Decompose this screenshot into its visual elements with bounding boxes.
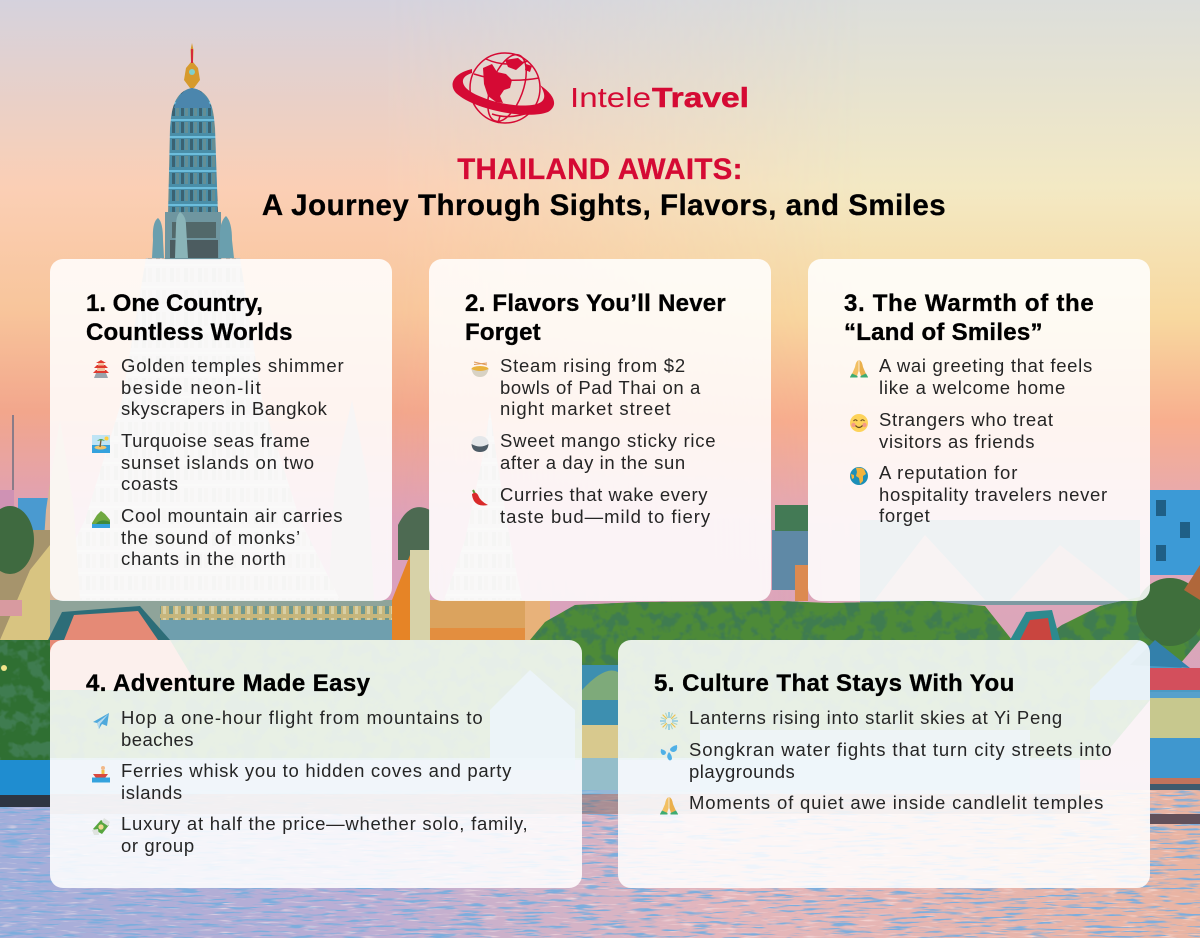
- water: [0, 758, 1200, 938]
- logo: InteleTravel: [452, 52, 749, 124]
- item: golden temples: Golden temples shimmer: [121, 355, 344, 376]
- item: wai greeting: A wai greeting that feels: [879, 355, 1093, 376]
- item: luxury: Luxury at half the price—whether solo, family,: [121, 813, 528, 834]
- icon: island: [92, 435, 110, 453]
- item: strangers: [850, 409, 1054, 452]
- item: cool mountain air: [92, 505, 343, 569]
- item: mango sticky rice: Sweet mango sticky rice: [500, 430, 716, 451]
- heading: 5. Culture That Stays With You: [654, 670, 1015, 697]
- item: golden temples: beside neon-lit: [121, 377, 262, 398]
- pavilions behind lower cards: [490, 640, 1200, 816]
- item: lanterns: Lanterns rising into starlit skies at Yi Peng: [689, 707, 1063, 728]
- north america: [483, 64, 512, 103]
- title line 2: A Journey Through Sights, Flavors, and Smiles: [262, 189, 946, 222]
- item: turquoise seas: coasts: [121, 473, 179, 494]
- item: flight: Hop a one-hour flight from mountains to: [121, 707, 484, 728]
- item: turquoise seas: sunset islands on two: [121, 452, 315, 473]
- item: reputation: forget: [879, 505, 931, 526]
- item: songkran: Songkran water fights that turn city streets into: [689, 739, 1113, 760]
- item: ferries: [92, 760, 512, 803]
- globe: [470, 50, 540, 126]
- item: reputation: [850, 462, 1108, 526]
- item: pad thai: Steam rising from $2: [500, 355, 686, 376]
- title line 1: THAILAND AWAITS:: [457, 153, 743, 186]
- icon: smiling face: [850, 414, 868, 432]
- item: luxury: [92, 813, 528, 856]
- item: luxury: or group: [121, 835, 195, 856]
- panel: Flavors You'll Never Forget: [429, 259, 771, 601]
- item: songkran: [660, 739, 1113, 782]
- item: mango sticky rice: [472, 430, 716, 473]
- item: strangers: visitors as friends: [879, 431, 1035, 452]
- main prang lower tiers: [40, 258, 345, 640]
- item: pad thai: night market street: [500, 398, 671, 419]
- item: turquoise seas: [92, 430, 315, 494]
- item: curries: Curries that wake every: [500, 484, 708, 505]
- heading: Countless Worlds: [86, 318, 293, 346]
- small corner prang left: [40, 420, 80, 600]
- item: pad thai: [472, 355, 701, 419]
- heading: [844, 290, 1094, 346]
- item: golden temples: skyscrapers in Bangkok: [121, 398, 327, 419]
- item: flight: beaches: [121, 729, 194, 750]
- item: strangers: Strangers who treat: [879, 409, 1054, 430]
- icon: speedboat: [92, 766, 110, 782]
- main prang tower: [152, 43, 234, 260]
- panel: Adventure Made Easy: [50, 640, 582, 888]
- icon: praying hands: [850, 360, 868, 378]
- item: cool mountain air: chants in the north: [121, 548, 287, 569]
- item: reputation: A reputation for: [879, 462, 1018, 483]
- icon: airplane: [93, 713, 109, 729]
- heading: 4. Adventure Made Easy: [86, 670, 370, 697]
- icon: globe: [850, 467, 868, 485]
- title: [262, 153, 946, 222]
- icon: water droplets: [660, 745, 678, 760]
- heading: [465, 290, 726, 346]
- item: flight: [93, 707, 484, 750]
- icon: mountain: [92, 511, 110, 528]
- item: songkran: playgrounds: [689, 761, 795, 782]
- icon: chili pepper: [472, 490, 488, 506]
- icon: fireworks: [660, 712, 678, 730]
- greenland and arctic islands: [505, 58, 532, 72]
- panel: One Country, Countless Worlds: [50, 259, 392, 601]
- heading: 1. One Country,: [86, 290, 263, 317]
- orbit ring: [453, 69, 554, 115]
- item: cool mountain air: Cool mountain air carries: [121, 505, 343, 526]
- item: ferries: Ferries whisk you to hidden coves and party: [121, 760, 512, 781]
- item: mango sticky rice: after a day in the sun: [500, 452, 686, 473]
- item: curries: taste bud—mild to fiery: [500, 506, 711, 527]
- item: turquoise seas: Turquoise seas frame: [121, 430, 310, 451]
- panel: The Warmth of the Land of Smiles: [808, 259, 1150, 601]
- secondary prang behind card 2: [430, 410, 530, 640]
- wordmark: Travel: [652, 82, 749, 113]
- item: curries: [472, 484, 711, 527]
- panel: Culture That Stays With You: [618, 640, 1150, 888]
- icon: rice bowl: [472, 436, 488, 452]
- icon: praying hands: [660, 797, 678, 814]
- trees: [0, 565, 1200, 770]
- item: golden temples: [93, 355, 344, 419]
- item: wai greeting: [850, 355, 1093, 398]
- item: pad thai: bowls of Pad Thai on a: [500, 377, 701, 398]
- item: quiet awe: Moments of quiet awe inside candlelit temples: [689, 792, 1104, 813]
- distant buildings: [0, 415, 1200, 605]
- icon: noodle bowl: [472, 362, 488, 377]
- item: cool mountain air: the sound of monks’: [121, 527, 301, 548]
- heading: 3. The Warmth of the: [844, 290, 1094, 317]
- icon: pagoda: [93, 360, 109, 378]
- secondary prang behind card 1: [328, 400, 374, 600]
- heading: Forget: [465, 318, 541, 346]
- wordmark: [570, 82, 749, 113]
- item: reputation: hospitality travelers never: [879, 484, 1108, 505]
- heading: “Land of Smiles”: [844, 318, 1043, 346]
- heading: [86, 290, 293, 346]
- wordmark: Intele: [570, 82, 651, 113]
- temple complex: [0, 506, 550, 640]
- heading: 2. Flavors You’ll Never: [465, 290, 726, 317]
- item: ferries: islands: [121, 782, 183, 803]
- icon: money with wings: [92, 818, 110, 835]
- item: wai greeting: like a welcome home: [879, 377, 1066, 398]
